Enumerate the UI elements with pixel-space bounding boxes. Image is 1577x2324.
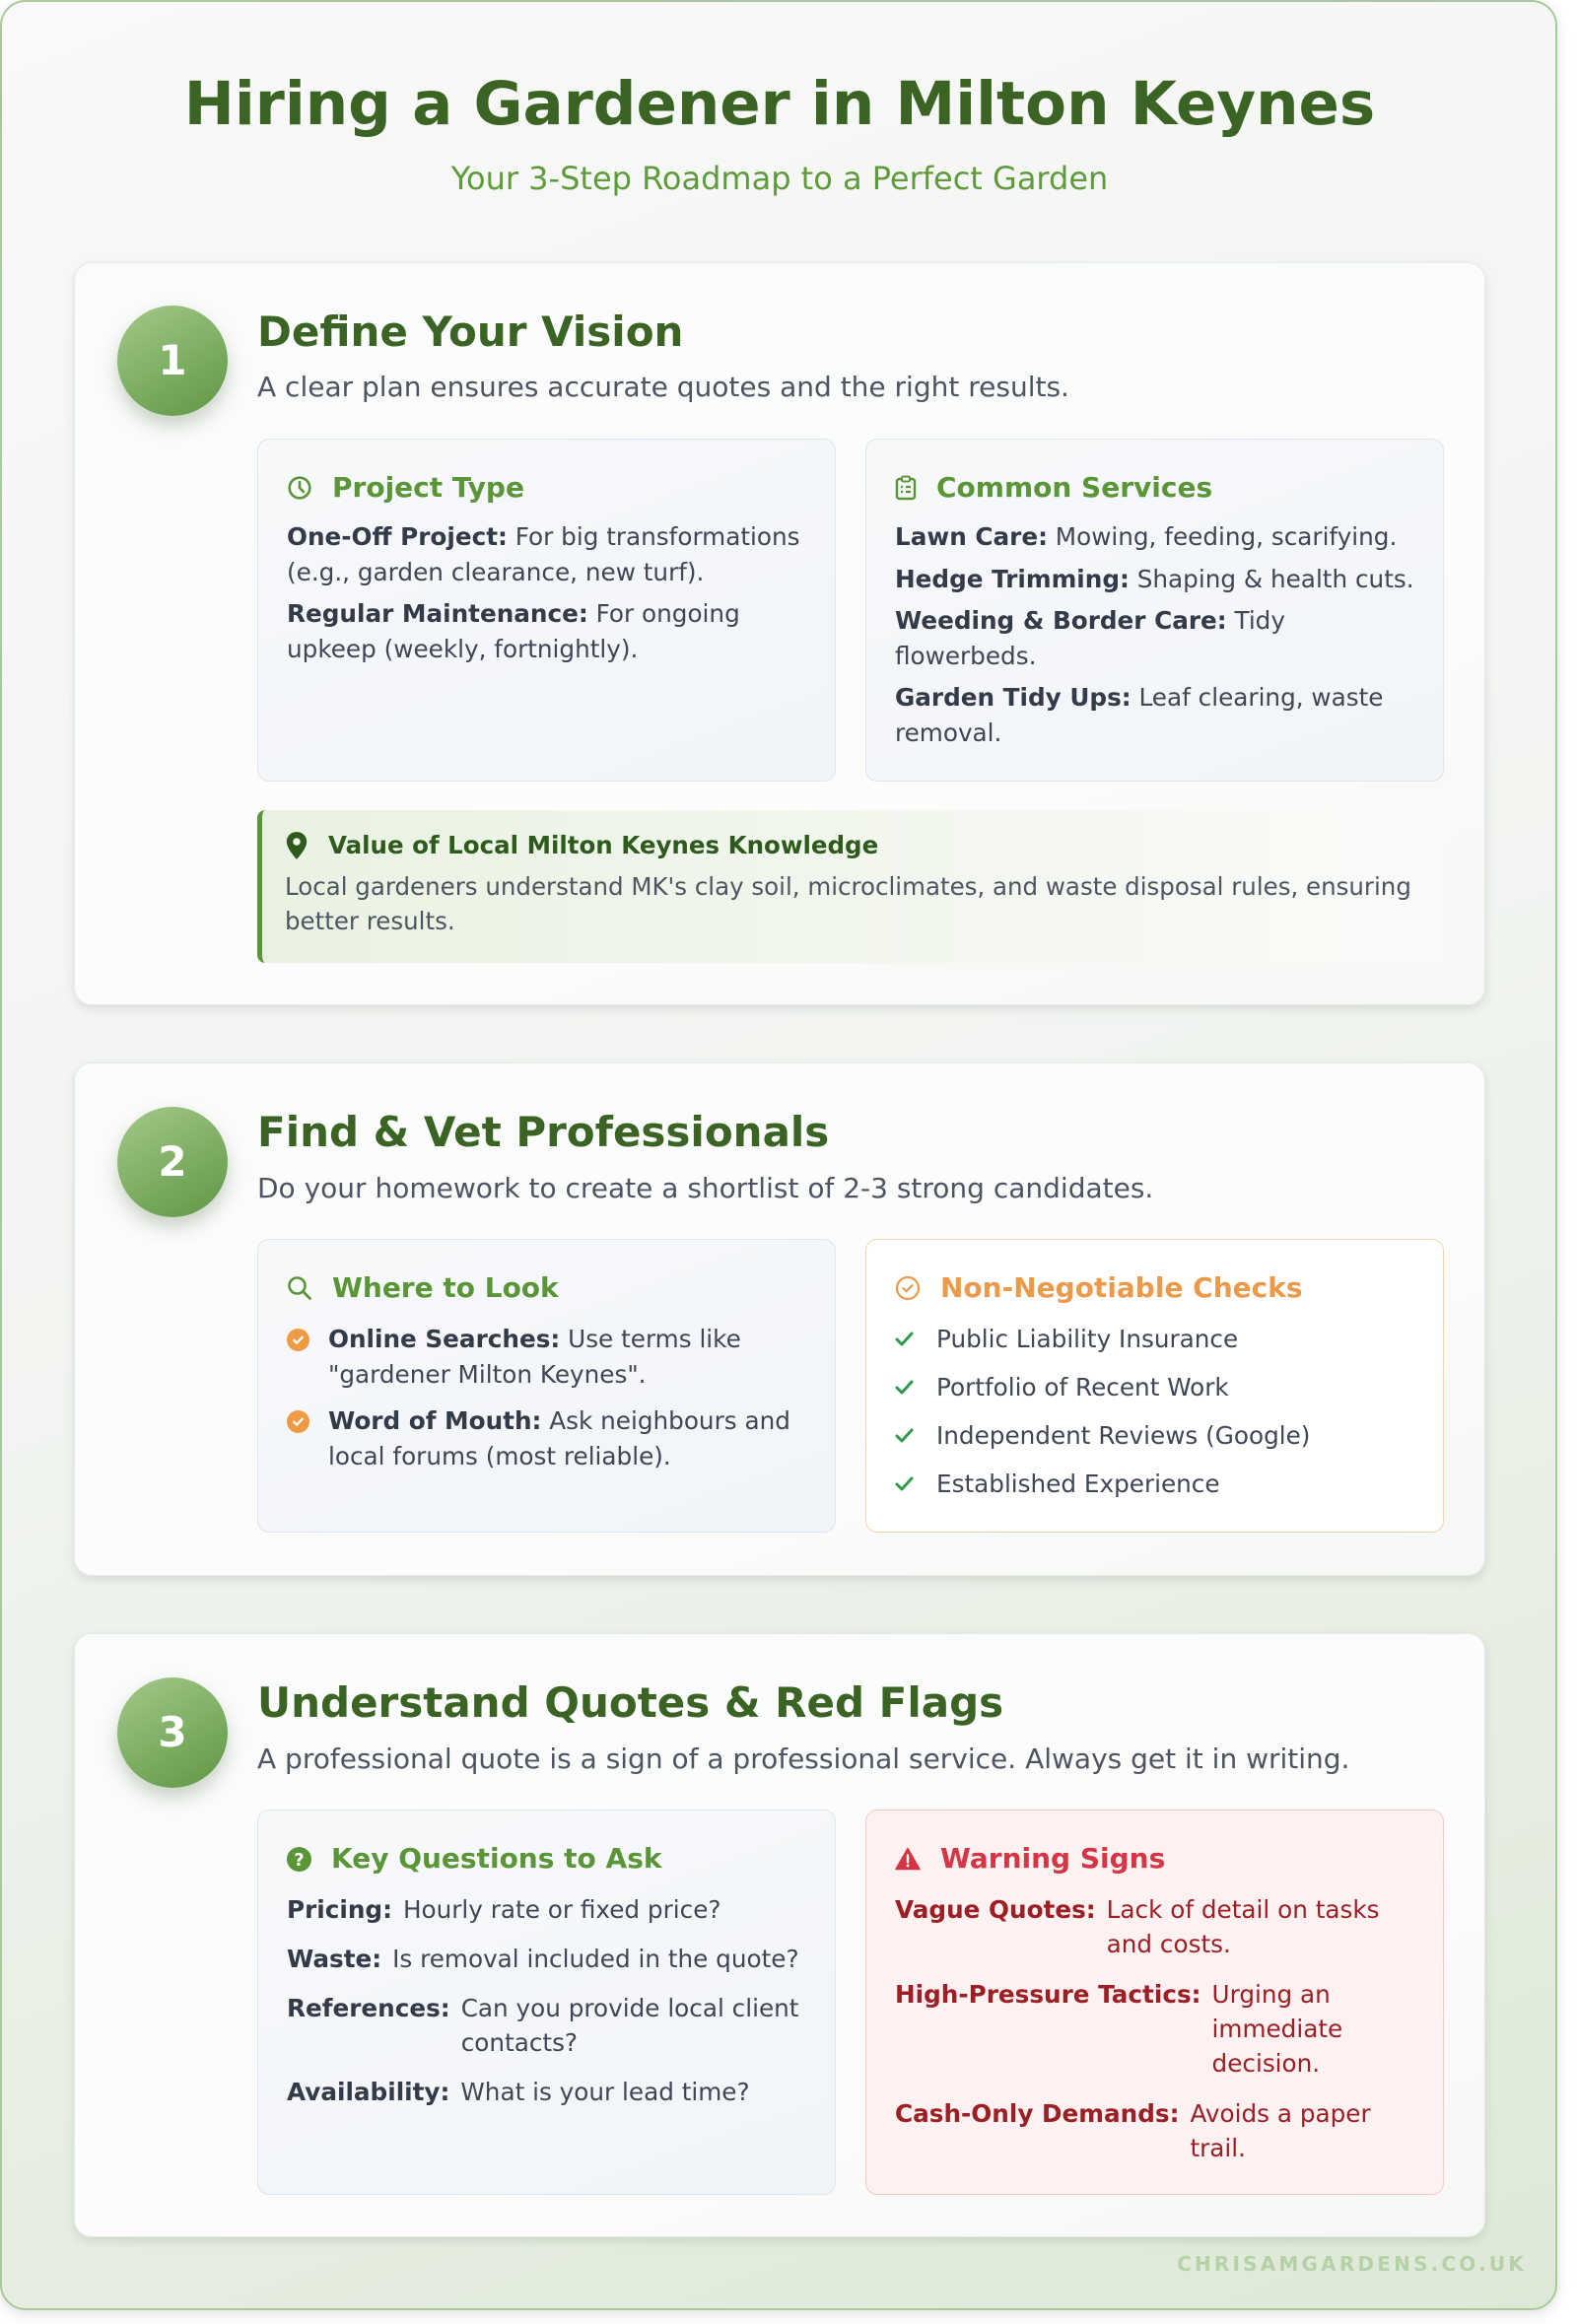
box: key questions: Can you provide local client contacts? — [461, 1994, 798, 2057]
box: warning signs: Cash-Only Demands: — [895, 2099, 1179, 2128]
heading: project type: Project Type — [332, 471, 524, 504]
heading: callout title: Value of Local Milton Keynes Knowledge — [328, 831, 878, 859]
box: non-negotiable checks: Portfolio of Recent Work — [936, 1373, 1229, 1401]
text: callout body: Local gardeners understand MK's clay soil, microclimates, and waste disposal rules, ensuring better results. — [285, 872, 1411, 935]
box: key questions: Hourly rate or fixed price? — [403, 1895, 720, 1924]
heading: warning signs: Warning Signs — [940, 1842, 1165, 1875]
heading: understand quotes: Understand Quotes & Red Flags — [257, 1678, 1003, 1727]
box: warning signs — [865, 1810, 1444, 2195]
icon: step number 2 — [117, 1107, 228, 1217]
icon: step number 3: 3 — [158, 1708, 187, 1756]
box: warning signs: Avoids a paper trail. — [1190, 2099, 1371, 2162]
box: key questions — [257, 1810, 836, 2195]
box: key questions: Availability: — [287, 2078, 449, 2106]
panel: step 1 define your vision — [74, 262, 1485, 1005]
box: project type — [257, 439, 836, 782]
heading: find & vet professionals: Find & Vet Professionals — [257, 1108, 829, 1156]
box: common services: Weeding & Border Care: Tidy flowerbeds. — [895, 606, 1285, 670]
box: non-negotiable checks: Independent Reviews (Google) — [936, 1421, 1310, 1450]
panel: step 2 find and vet — [74, 1062, 1485, 1576]
heading: where to look: Where to Look — [332, 1271, 559, 1304]
box: warning signs: Lack of detail on tasks and costs. — [1107, 1895, 1380, 1958]
box: key questions: Pricing: — [287, 1895, 392, 1924]
box: non-negotiable checks: Established Experience — [936, 1470, 1220, 1498]
heading: key questions: ? — [294, 1850, 305, 1870]
text: step 2 description: Do your homework to create a shortlist of 2-3 strong candidates. — [257, 1172, 1153, 1204]
box: non-negotiable checks — [865, 1239, 1444, 1533]
footer: website: CHRISAMGARDENS.CO.UK — [1177, 2252, 1527, 2276]
heading: key questions: Key Questions to Ask — [331, 1842, 661, 1875]
icon: step number 1: 1 — [158, 336, 187, 384]
box: key questions: References: — [287, 1994, 450, 2022]
text: step 1 description: A clear plan ensures accurate quotes and the right results. — [257, 371, 1069, 403]
heading: define your vision: Define Your Vision — [257, 308, 683, 356]
box: common services: Garden Tidy Ups: Leaf clearing, waste removal. — [895, 683, 1383, 747]
box: project type: Regular Maintenance: For ongoing upkeep (weekly, fortnightly). — [287, 599, 740, 662]
box: project type: One-Off Project: For big transformations (e.g., garden clearance, new turf). — [287, 522, 800, 585]
box: key questions: Is removal included in the quote? — [392, 1945, 799, 1973]
box: warning signs: High-Pressure Tactics: — [895, 1980, 1201, 2009]
callout: local knowledge — [257, 810, 1444, 963]
text: step 3 description: A professional quote is a sign of a professional service. Always get it in writing. — [257, 1743, 1349, 1775]
box: common services — [865, 439, 1444, 782]
box: key questions: Waste: — [287, 1945, 381, 1973]
box: key questions: What is your lead time? — [460, 2078, 750, 2106]
box: common services: Lawn Care: Mowing, feeding, scarifying. — [895, 522, 1397, 551]
heading: common services: Common Services — [936, 471, 1212, 504]
box: non-negotiable checks: Public Liability Insurance — [936, 1325, 1238, 1353]
box: where to look: Online Searches: Use terms like "gardener Milton Keynes". — [328, 1325, 741, 1388]
box: where to look: Word of Mouth: Ask neighbours and local forums (most reliable). — [328, 1406, 790, 1470]
box: warning signs: Urging an immediate decision. — [1212, 1980, 1342, 2078]
subtitle: Your 3-Step Roadmap to a Perfect Garden — [451, 160, 1108, 197]
box: where to look — [257, 1239, 836, 1533]
heading: non-negotiable checks: Non-Negotiable Checks — [940, 1271, 1303, 1304]
box: warning signs: Vague Quotes: — [895, 1895, 1096, 1924]
icon: step number 3 — [117, 1677, 228, 1788]
icon: step number 2: 2 — [158, 1137, 187, 1186]
panel: step 3 quotes and red flags — [74, 1633, 1485, 2237]
box: common services: Hedge Trimming: Shaping & health cuts. — [895, 564, 1414, 593]
title: Hiring a Gardener in Milton Keynes — [184, 69, 1375, 139]
icon: step number 1 — [117, 306, 228, 416]
